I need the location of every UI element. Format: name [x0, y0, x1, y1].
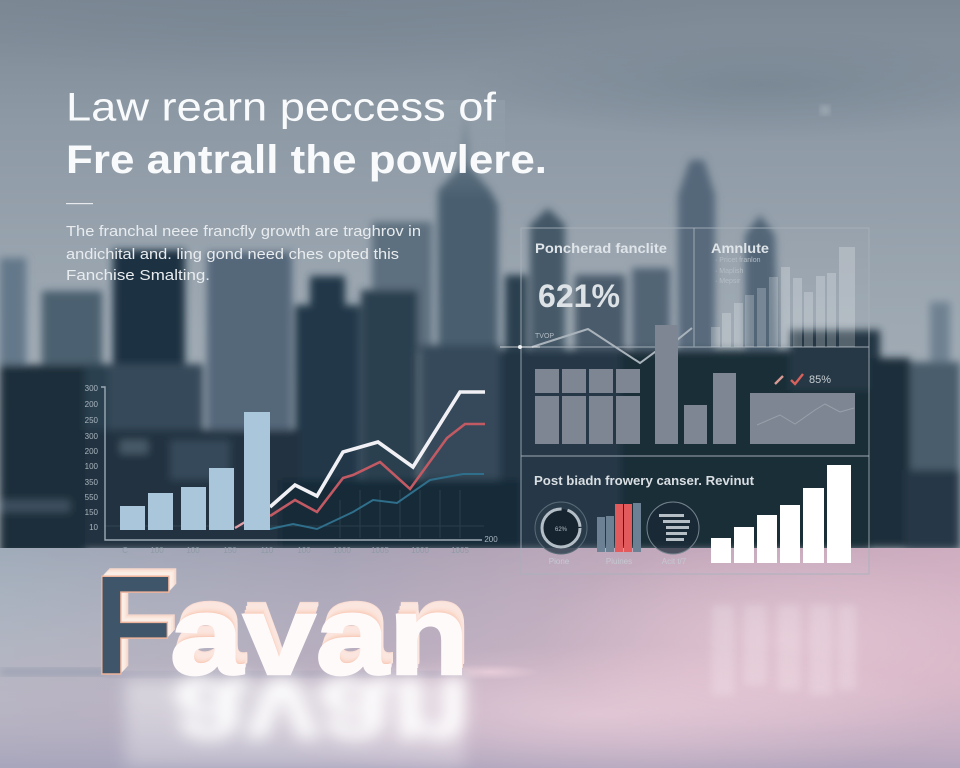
- x axis labels: 1005: [451, 546, 469, 555]
- x axis labels: 200: [484, 535, 498, 544]
- small column chart: [597, 503, 641, 552]
- axes: [101, 387, 482, 540]
- panel: amplitude bar chart: · Mepsir: [715, 278, 741, 285]
- heading divider and intro text block: Fanchise Smalting.: [66, 267, 210, 284]
- panel: middle blocks: [535, 325, 855, 444]
- small captions: Pione: [549, 557, 570, 566]
- y axis labels: 300: [85, 432, 99, 441]
- logo: 3D word Favan: F: [93, 546, 174, 705]
- bar chart: white revenue bars: [711, 465, 851, 563]
- panel: KPI: [532, 240, 692, 363]
- icon: donut gauge: 62%: [555, 527, 568, 533]
- x axis labels: C: [122, 546, 128, 555]
- y axis labels: 150: [85, 508, 99, 517]
- x axis labels: 100: [186, 546, 200, 555]
- small captions: Acit t/7: [662, 557, 687, 566]
- y axis labels: 200: [85, 400, 99, 409]
- icon: donut gauge: [535, 502, 587, 554]
- panel: amplitude bar chart: · Maplish: [715, 268, 744, 275]
- logo: 3D word Favan: avan: [170, 573, 469, 698]
- panel: bottom revenue section: Post biadn frowery canser. Revinut: [534, 473, 755, 488]
- small captions: Piuines: [606, 557, 632, 566]
- y axis labels: 10: [89, 523, 99, 532]
- x axis labels: 1000: [411, 546, 429, 555]
- panel: KPI: 621%: [538, 278, 620, 314]
- icon: list circle: [647, 502, 699, 554]
- y axis labels: 100: [85, 462, 99, 471]
- title: Law rearn peccess of: [66, 86, 497, 130]
- panel: amplitude bar chart: · Pricet franlon: [715, 257, 761, 264]
- x axis labels: 1000: [333, 546, 351, 555]
- heading divider and intro text block: andichital and. ling gond need ches opted this: [66, 246, 399, 263]
- y axis labels: 200: [85, 447, 99, 456]
- line sparkline: [532, 328, 692, 363]
- bars: [120, 412, 270, 530]
- y axis labels: 250: [85, 416, 99, 425]
- y axis labels: [85, 384, 99, 532]
- panel: middle blocks: 85%: [809, 374, 831, 386]
- small captions: [549, 557, 687, 566]
- heading divider and intro text block: The franchal neee francfly growth are traghrov in: [66, 223, 421, 240]
- y axis labels: 350: [85, 478, 99, 487]
- panel: KPI: Poncherad fanclite: [535, 240, 667, 256]
- panel: bottom revenue section: [534, 465, 851, 566]
- x axis labels: 100: [297, 546, 311, 555]
- y axis labels: 300: [85, 384, 99, 393]
- panel: amplitude bar chart: Amnlute: [711, 240, 769, 256]
- logo: 3D word Favan: [93, 546, 469, 705]
- x axis labels: 110: [261, 546, 274, 555]
- title: Fre antrall the powlere.: [66, 138, 547, 182]
- panel: KPI: TVOP: [535, 333, 554, 340]
- line series: [235, 522, 245, 528]
- x axis labels: 1005: [371, 546, 389, 555]
- x axis labels: 150: [223, 546, 237, 555]
- x axis labels: 100: [150, 546, 164, 555]
- x axis labels: [122, 535, 498, 555]
- lens flare: [500, 345, 540, 349]
- y axis labels: 550: [85, 493, 99, 502]
- panel: amplitude bar chart: [711, 240, 855, 347]
